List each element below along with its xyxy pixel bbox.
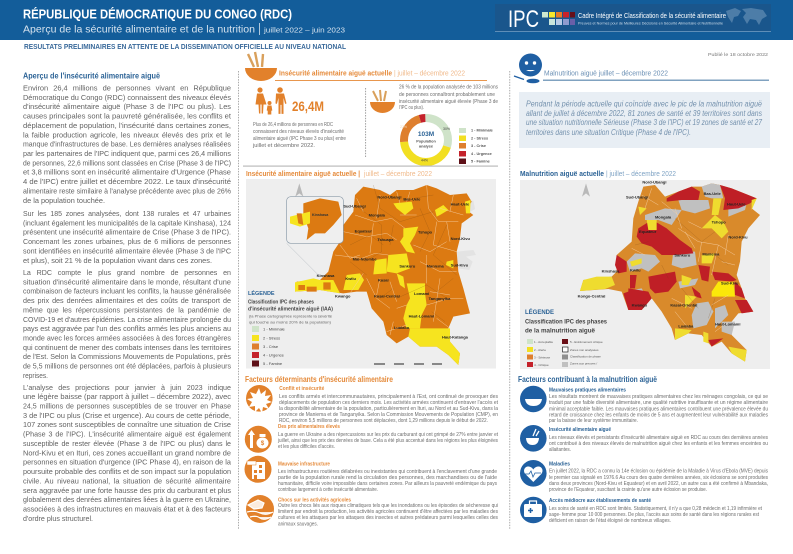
driver: infrastructure: contribue largement à cette insécurité alimentaire. xyxy=(278,487,378,493)
factor: poor feeding practices: par la baisse de leur système immunitaire. xyxy=(549,418,638,424)
overview paragraph 4: d'ordre plus structurel. xyxy=(23,514,93,523)
map labels: Maniema xyxy=(427,264,444,269)
map legend: 2 - Alerte xyxy=(534,348,546,352)
map labels: Haut-Uele xyxy=(451,202,470,207)
map labels: Sud-Ubangi xyxy=(626,194,648,199)
factor: diseases xyxy=(520,460,768,493)
donut chart: 22% xyxy=(400,125,407,129)
factor: poor health access: Accès médiocre aux établissements de santé xyxy=(549,498,652,504)
driver: agricultural shocks: cultures et les attaques par les attaques des insectes et autres prédateurs parmi lesquelles celles des xyxy=(278,515,498,521)
publication date: Publié le 18 octobre 2022 xyxy=(708,52,768,58)
donut description xyxy=(399,84,498,111)
map legend: Classification IPC des phases xyxy=(248,300,314,306)
icon: family xyxy=(256,87,286,114)
overview paragraph 2: Concernant les zones urbaines, plus de 6 millions de personnes xyxy=(23,237,231,246)
driver: high prices: La guerre en Ukraine a des répercussions sur les prix du carburant qui ont grimpé de 27% entre janvier et xyxy=(278,432,498,438)
factor: poor health access: déficient en raison de l'état éloigné de nombreux villages. xyxy=(549,518,671,524)
map labels: Equateur xyxy=(355,228,372,233)
map labels: Tanganyika xyxy=(429,296,451,301)
map legend xyxy=(248,289,333,366)
driver: conflict xyxy=(246,385,499,424)
factor: poor health access: Les soins de santé en RDC sont limités. Statistiquement, il n'y a que 0,28 médecin et 1,19 infirmière et xyxy=(549,506,762,512)
driver: agricultural shocks: limitent par endroit la production, les activités agricoles continuent d'être affectées par les maladies des xyxy=(278,509,498,515)
donut description: insécurité alimentaire aiguë élevée (Phase 3 de xyxy=(399,99,498,105)
DRC map: malnutrition xyxy=(578,179,760,362)
preliminary results notice: RESULTATS PRELIMINAIRES EN ATTENTE DE LA DISSEMINATION OFFICIELLE AU NIVEAU NATIONAL xyxy=(24,44,347,51)
factor: poor feeding practices: Mauvaises pratiques alimentaires xyxy=(549,388,626,394)
north arrow xyxy=(582,183,590,197)
caption: juillet et décembre 2022. xyxy=(252,143,315,149)
overview paragraph 3: monde avec les forces armées associées à des forces étrangères xyxy=(23,334,231,342)
overview paragraph 4: (Phase 3 de l'IPC). L'insécurité alimentaire aiguë est également xyxy=(23,430,231,439)
map legend: 2 - Stress xyxy=(263,336,280,340)
overview paragraph 3: reprises. xyxy=(23,371,48,380)
IPC logo: Cadre Intégré de Classification de la sécurité alimentaire xyxy=(578,11,726,20)
DRC map: food insecurity xyxy=(287,183,476,365)
map labels: Kwilu xyxy=(345,276,357,281)
overview paragraph 4: 3 de l'IPC ou plus (Crise et urgence). Au cours de cette période, xyxy=(23,411,231,420)
overview paragraph 4: susceptible de rester élevée (Phase 3 de l'IPC ou plus) dans le xyxy=(23,439,231,448)
overview paragraph 4: poursuite probable des conflits et de son impact sur la population xyxy=(23,467,231,476)
map labels: Bas-Uele xyxy=(403,196,421,201)
map labels xyxy=(317,194,470,339)
icon: small bowl xyxy=(370,90,395,113)
factor: acute food insecurity: allaitantes. xyxy=(549,447,571,453)
header banner xyxy=(0,0,793,40)
panel: current acute food insecurity xyxy=(245,52,498,164)
driver: high prices: et les plus difficiles d'accès. xyxy=(278,444,335,450)
overview paragraph 4: Nord-Kivu et en Ituri, ces zones accueillant un grand nombre de xyxy=(23,448,231,457)
driver: agricultural shocks xyxy=(246,495,498,527)
donut chart: 103M xyxy=(418,131,434,138)
map heading dates: | juillet – décembre 2022 xyxy=(606,169,676,178)
IPC logo xyxy=(495,4,771,33)
overview paragraph 1: Environ 26,4 millions de personnes vivant en République xyxy=(23,84,231,92)
map legend: 1 - Acceptable xyxy=(534,340,553,344)
driver: agricultural shocks: Outre les chocs liés aux risques climatiques tels que les inondations ou les épisodes de sécheresse qui xyxy=(278,503,498,509)
overview paragraph 3: La RDC compte le plus grand nombre de personnes en xyxy=(23,268,231,277)
map labels: Maniema xyxy=(702,252,720,257)
panel: overview text column xyxy=(23,72,232,523)
map labels: Mongala xyxy=(369,213,386,218)
driver: conflict: province de Maniema et de Tanganyika. Selon la Commission Mouvements de Population (CMP), en xyxy=(279,412,498,418)
map legend: 4 - Critique xyxy=(534,363,549,367)
panel: food insecurity map xyxy=(246,169,496,368)
overview paragraph 1: et 3,8 millions sont en insécurité alimentaire d'Urgence (Phase xyxy=(23,168,231,177)
map labels: Haut-Lomami xyxy=(715,322,740,327)
map legend: 4 - Urgence xyxy=(263,352,285,358)
factor: acute food insecurity xyxy=(520,425,768,453)
icon: child face with spoon xyxy=(514,54,542,83)
driver: infrastructure: Les infrastructures routières délabrées ou inexistantes qui contribuent à l'enclavement d'une grande xyxy=(278,469,497,475)
overview paragraph 4: globalement des denrées alimentaires liées à la guerre en Ukraine, xyxy=(23,495,231,504)
driver: high prices: Des prix alimentaires élevés xyxy=(278,424,340,430)
donut legend: 4 - Urgence xyxy=(471,152,492,156)
map labels: Sankuru xyxy=(399,263,416,268)
callout: allant de juillet à décembre 2022, 81 zones de santé et 39 territoires sont dans xyxy=(526,109,762,118)
map labels: Kongo-Central xyxy=(578,293,605,298)
map labels: Kasai-Central xyxy=(374,294,400,299)
overview paragraph 1: d'insécurité alimentaire aiguë (Phase 3 de l'IPC ou plus). Les xyxy=(23,102,231,111)
overview paragraph 4: personnes en situation d'urgence (IPC Phase 4), en raison de la xyxy=(23,458,232,467)
subtitle dates: juillet 2022 – juin 2023 xyxy=(263,28,345,34)
map labels: Tshopo xyxy=(712,219,726,224)
scale bar xyxy=(374,363,442,365)
map legend: qui touche au moins 20% de la population) xyxy=(249,320,331,324)
donut description: l'IPC ou plus). xyxy=(399,105,424,111)
caption: connaissent des niveaux élevés d'insécurité xyxy=(253,129,344,135)
heading dates: | juillet – décembre 2022 xyxy=(394,68,465,78)
map labels: Haut-Katanga xyxy=(442,334,469,339)
map legend: d'insécurité alimentaire aiguë (IAA) xyxy=(248,306,333,312)
factor: poor feeding practices: traduit par une faible diversité alimentaire, une qualité nutritive insuffisante et un régime alimentaire xyxy=(549,400,768,406)
donut chart: analysé xyxy=(419,144,433,148)
panel: food insecurity drivers xyxy=(244,374,499,527)
subtitle divider xyxy=(258,23,261,35)
overview paragraph 4: associées à des infrastructures en mauvais état et à des facteurs xyxy=(23,504,231,514)
overview paragraph 4 xyxy=(23,383,232,523)
overview paragraph 3: de l'Est. Selon la Commissions Mouvements de Populations, près xyxy=(23,352,231,361)
section heading: Facteurs déterminants d'insécurité alimentaire xyxy=(245,374,393,384)
factor: diseases: province de l'Equateur, suscitant la crainte qu'une autre éclosion se produise. xyxy=(549,487,707,493)
map legend: Zones aux preuves / xyxy=(570,362,597,366)
overview paragraph 1: manque d'infrastructures de base. Les dernières analyses réalisées xyxy=(23,140,231,149)
IPC logo: Preuves et Normes pour de Meilleures Décisions en Sécurité Alimentaire et Nutritionnelle xyxy=(578,22,723,26)
inset Kinshasa: Kinshasa xyxy=(312,213,329,217)
map labels: Haut-Uele xyxy=(727,202,746,207)
driver: infrastructure xyxy=(244,456,497,493)
donut legend xyxy=(459,128,493,164)
map legend: de la malnutrition aiguë xyxy=(525,328,596,334)
overview heading: Aperçu de l'insécurité alimentaire aiguë xyxy=(23,72,161,80)
map labels: Kwango xyxy=(335,294,351,299)
overview paragraph 4: civile. Au niveau national, la situation de sécurité alimentaire xyxy=(23,476,231,485)
map legend: 3 - Sérieuse xyxy=(534,356,551,360)
driver: high prices: $ xyxy=(261,441,265,447)
big number: 26,4M xyxy=(292,98,324,114)
driver: conflict: déplacements de population ces derniers mois. Les activités armées continuent d'entraver l'accès et xyxy=(279,400,498,406)
factor: acute food insecurity: Insécurité alimentaire aiguë xyxy=(549,427,612,433)
overview paragraph 1: Démocratique du Congo (RDC) connaissent des niveaux élevés xyxy=(23,93,231,102)
factor: poor health access xyxy=(520,497,762,524)
overview paragraph 1: alimentaire reste similaire à l'analyse précédente avec plus de 26% xyxy=(23,186,231,196)
map labels: Sud-Kivu xyxy=(451,263,469,268)
map labels: Sud-Kivu xyxy=(721,280,739,285)
map legend: 1 - Minimale xyxy=(263,326,286,332)
overview paragraph 2: (incluant également les municipalités de la capitale Kinshasa), 124 xyxy=(23,218,231,227)
heading: Insécurité alimentaire aiguë actuelle xyxy=(279,68,392,78)
map labels: Tshuapa xyxy=(377,237,394,242)
overview paragraph 3: pays est aggravée par l'un des conflits armés les plus anciens au xyxy=(23,324,231,333)
map labels: Lualaba xyxy=(678,324,694,329)
overview paragraph 1: par les partenaires de l'IPC indiquent que, parmi ces 26,4 millions xyxy=(23,149,231,158)
overview paragraph 1: la faible production agricole, les niveaux élevés des prix et le xyxy=(23,130,231,139)
map labels: Kwango xyxy=(632,303,648,308)
map legend: 5 - Extrêmement critique xyxy=(570,340,603,344)
map labels: Sud-Ubangi xyxy=(343,203,366,208)
overview paragraph 1: de la population touchée. xyxy=(23,196,105,205)
title: RÉPUBLIQUE DÉMOCRATIQUE DU CONGO (RDC) xyxy=(23,6,292,22)
donut chart xyxy=(400,118,450,162)
map legend: Classification de phase xyxy=(570,354,601,358)
map labels: Nord-Ubangi xyxy=(642,179,666,184)
driver: agricultural shocks: Chocs sur les activités agricoles xyxy=(278,498,351,504)
donut legend: 2 - Stress xyxy=(471,136,488,140)
map labels: Lomami xyxy=(414,291,429,296)
heading: Malnutrition aiguë juillet – décembre 2022 xyxy=(544,70,668,78)
map labels: Kinshasa xyxy=(602,268,620,273)
map labels: Nord-Kivu xyxy=(451,236,470,241)
overview paragraph 4: sera aggravée par une forte hausse des prix du carburant et plus xyxy=(23,486,231,495)
map labels: Equateur xyxy=(639,229,657,234)
section heading: Facteurs contribuant à la malnutrition aiguë xyxy=(518,374,657,384)
inset Kinshasa xyxy=(287,197,343,277)
overview paragraph 3: même que les répercussions persistantes de la pandémie de xyxy=(23,305,231,314)
callout: Pendant la période actuelle qui coïncide avec le pic de la malnutrition aiguë xyxy=(526,100,763,108)
map labels: Lualaba xyxy=(394,325,410,330)
IPC logo: IPC xyxy=(508,6,539,33)
panel: current acute malnutrition xyxy=(514,54,770,148)
callout xyxy=(519,92,770,148)
map heading dates: juillet – décembre 2022 xyxy=(363,169,432,178)
donut legend: 1 - Minimale xyxy=(471,128,493,132)
caption: alimentaire aiguë (IPC Phase 3 ou plus) entre xyxy=(253,136,346,142)
overview paragraph 3: des prix des denrées alimentaires et des coûts de transport de xyxy=(23,296,231,305)
driver: high prices xyxy=(245,424,498,453)
map legend: Classification IPC des phases xyxy=(525,320,608,326)
factor: acute food insecurity: ont contribué à des niveaux élevés de malnutrition aiguë chez les enfants et les femmes enceintes ou xyxy=(549,441,768,447)
caption xyxy=(252,122,346,149)
map legend: 3 - Crise xyxy=(263,344,279,349)
map legend: LÉGENDE xyxy=(525,308,554,316)
overview paragraph 1: de personnes, 22,6 millions sont classées en Crise (Phase 3 de l'IPC) xyxy=(23,158,231,167)
map heading: Insécurité alimentaire aiguë actuelle | xyxy=(246,169,360,178)
overview paragraph 1: causes principales sont la pauvreté généralisée, les conflits et xyxy=(23,112,231,121)
factor: poor feeding practices: retard de croissance chez les enfants de moins de 5 ans et augmentent leur vulnérabilité aux maladies xyxy=(549,412,768,418)
donut description: de personnes connaîtront probablement une xyxy=(399,92,495,98)
donut legend: 5 - Famine xyxy=(471,160,490,164)
overview paragraph 3: COVID-19 et d'autres épidémies. La crise alimentaire prolongée du xyxy=(23,315,231,324)
overview paragraph 4: 24,5 millions de personnes susceptibles de se trouver en Phase xyxy=(23,402,231,410)
map legend xyxy=(525,308,608,367)
donut description: 26 % de la population analysée de 103 millions xyxy=(399,84,498,90)
factor: poor feeding practices xyxy=(520,386,768,424)
overview paragraph 1: déplacement de population, l'insécurité dans certaines zones, xyxy=(23,121,231,130)
overview paragraph 3: qui continuent de mener des combats intenses dans les territoires xyxy=(23,343,231,352)
map legend: LÉGENDE xyxy=(248,289,275,297)
factor: poor feeding practices: Les résultats montrent de mauvaises pratiques alimentaires chez les ménages congolais, ce qui se xyxy=(549,394,768,400)
map labels: Kinshasa xyxy=(317,273,335,278)
overview paragraph 2: Sur les 185 zones analysées, dont 138 rurales et 47 urbaines xyxy=(23,209,231,218)
driver: high prices: juillet, ainsi que les prix des denrées de base. Cela a été plus accentué dans les régions les plus éloignées xyxy=(277,438,498,444)
factor: poor feeding practices: minimal acceptable faible. Les mauvaises pratiques alimentaires contribuent une prévalence élevée du xyxy=(549,406,768,412)
map labels: Nord-Kivu xyxy=(728,234,748,239)
overview paragraph 2: présentent une insécurité alimentaire de Crise (Phase 3 de l'IPC). xyxy=(23,228,231,237)
map labels: Kwilu xyxy=(630,268,641,273)
map legend: Zones non analysées xyxy=(570,348,599,352)
driver: conflict: la disponibilité alimentaire de la population, particulièrement en Ituri, au Nord et au Sud-Kivu, dans la xyxy=(279,406,499,412)
panel: malnutrition map xyxy=(520,169,770,369)
subtitle: Aperçu de la sécurité alimentaire et de la nutrition xyxy=(23,24,255,36)
factor: diseases: Maladies xyxy=(549,462,570,468)
map labels: Mai-Ndombe xyxy=(353,257,377,262)
overview paragraph 3: combinaison de facteurs incluant les conflits, la hausse généralisée xyxy=(23,287,231,296)
driver: conflict: RDC, environ 5,5 millions de personnes sont déplacées, dont 1,29 millions depuis le début de 2022. xyxy=(279,418,488,424)
factor: poor health access: sage- femme pour 10 000 personnes. De plus, l'accès aux soins de santé dans les régions rurales est xyxy=(549,512,759,518)
driver: agricultural shocks: animaux sauvages. xyxy=(278,521,318,527)
map labels: Sankuru xyxy=(674,253,691,258)
overview paragraph 4: une légère baisse (par rapport à juillet – décembre 2022), avec xyxy=(23,392,231,401)
overview paragraph 4: L'analyse des projections pour janvier à juin 2023 indique xyxy=(23,383,231,392)
map heading: Malnutrition aiguë actuelle xyxy=(520,169,604,178)
driver: infrastructure: partie de la population rurale rend la circulation des personnes, des marchandises ou de l'aide xyxy=(278,475,497,481)
overview paragraph 1 xyxy=(23,84,231,205)
map labels: Tshopo xyxy=(418,230,433,235)
donut chart: 44% xyxy=(421,158,428,162)
map legend: (la Phase cartographiée représente la sévérité xyxy=(249,314,332,318)
map labels: Bas-Uele xyxy=(704,191,722,196)
driver: infrastructure: Mauvaise infrastructure xyxy=(278,462,331,468)
north arrow xyxy=(295,183,303,197)
map labels: Kasai-Oriental xyxy=(670,303,697,308)
overview paragraph 3: de 5,5 millions de personnes ont été déplacées, parfois à plusieurs xyxy=(23,362,231,371)
map labels xyxy=(578,179,748,329)
overview paragraph 3: situation d'insécurité alimentaire dans le monde, résultant d'une xyxy=(23,277,231,286)
donut chart: Population xyxy=(416,140,436,144)
map labels: Mongala xyxy=(655,214,672,219)
donut chart: 30% xyxy=(443,127,450,131)
overview paragraph 2: sont identifiées en insécurité alimentaire élevée (Phase 3 de l'IPC xyxy=(23,246,232,255)
donut legend: 3 - Crise xyxy=(471,144,486,148)
map legend: 5 - Famine xyxy=(263,361,283,366)
driver: infrastructure: humanitaire, difficile voire impossible dans certaines zones. Par ailleurs la pauvreté endémique du pays xyxy=(278,481,497,487)
overview paragraph 2: et plus), soit 21 % de la population vivant dans ces zones. xyxy=(23,256,212,265)
overview paragraph 1: 4 de l'IPC) entre juillet et décembre 2022. Le taux d'insécurité xyxy=(23,177,231,186)
overview paragraph 2 xyxy=(23,209,232,265)
icon: bowl with wheat xyxy=(245,52,277,81)
callout: territoires dans une situation Critique (Phase 4 de l'IPC). xyxy=(526,128,691,137)
map labels: Kasai xyxy=(378,278,389,283)
driver: conflict: Conflit et insécurité xyxy=(279,386,325,392)
map labels: Nord-Ubangi xyxy=(377,194,401,199)
overview paragraph 4: 107 zones sont susceptibles de connaître une situation de Crise xyxy=(23,420,231,429)
driver: conflict: Les conflits armés et intercommunautaires, principalement à l'Est, ont continué de provoquer des xyxy=(279,394,498,400)
panel: malnutrition factors xyxy=(518,374,768,524)
map labels: Haut-Lomami xyxy=(409,313,434,318)
overview paragraph 3 xyxy=(23,268,231,380)
caption: Plus de 26,4 millions de personnes en RDC xyxy=(253,122,333,128)
